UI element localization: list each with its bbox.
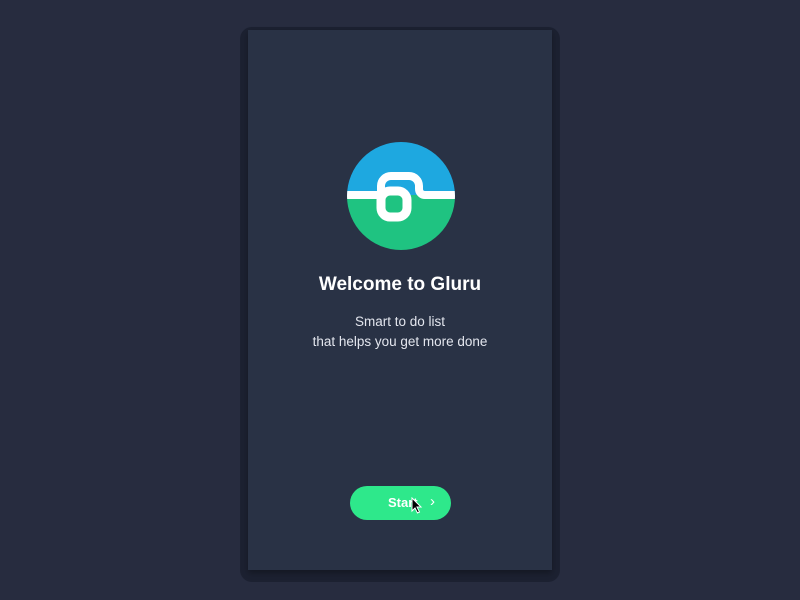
subtitle: Smart to do list — [355, 314, 445, 329]
screen — [248, 30, 552, 570]
logo — [347, 142, 455, 250]
phone frame — [240, 27, 560, 582]
start button: Start — [388, 495, 418, 510]
start button — [350, 486, 451, 520]
subtitle: that helps you get more done — [313, 334, 487, 349]
icon: cursor — [412, 497, 422, 514]
title: Welcome to Gluru — [319, 274, 481, 295]
subtitle — [312, 314, 487, 349]
start button: › — [430, 493, 435, 510]
